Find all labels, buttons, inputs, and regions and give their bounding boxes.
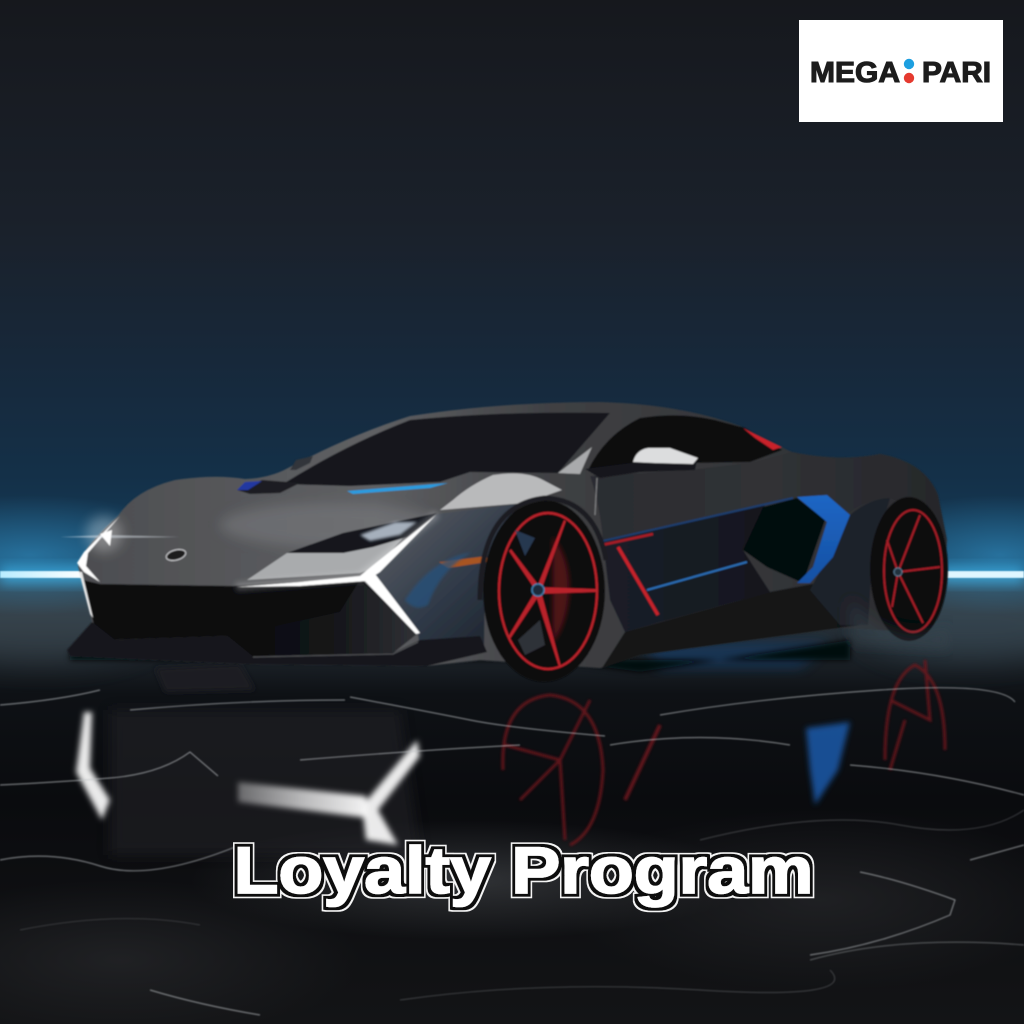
orange side marker [439,556,487,568]
blue scoop [797,495,850,583]
front splitter [67,622,487,666]
hood vent and blue accents [237,456,448,494]
red window accent [743,428,782,450]
sports car [60,402,950,682]
car ground shadow [70,640,850,672]
sill [602,575,860,668]
logo badge [799,20,1003,122]
rear fender [810,498,890,625]
background wall [0,0,1024,580]
lit panel below headlight [247,538,403,580]
hood highlight [220,503,440,547]
logo word: pari: PARI [922,57,991,89]
reflection: headlight strokes [76,712,420,845]
horizon glow [0,495,210,615]
reflection: car body shade [110,710,420,855]
daytime running lights [77,514,437,634]
grille [83,578,418,657]
front wheel [480,498,606,682]
reflection: wheels [503,660,945,845]
fender blue reflection [405,552,472,608]
rear shoulder haunch [590,452,947,541]
marble floor [0,578,1024,1024]
hood badge [165,548,187,562]
logo dots [904,59,914,83]
side intake [743,498,825,583]
upper lit panel [440,473,562,510]
front fender [362,503,525,655]
side window [588,415,782,470]
headlight [287,513,437,553]
door mirror [585,448,698,478]
logo word: mega: MEGA [810,57,900,89]
headlight flare [60,516,180,552]
door accents [595,478,793,615]
rear wheel [850,497,950,650]
lower door panel [603,498,797,632]
reflection: blue intake [806,722,850,805]
car body silhouette [68,402,947,668]
floor reflections [0,642,1024,1015]
windscreen [283,413,610,486]
a-pillar highlight [558,447,592,474]
marble veins [0,688,1024,1015]
lower intake panel [228,580,418,657]
title: Loyalty Program [234,833,814,907]
horizon light beams [0,566,1024,584]
